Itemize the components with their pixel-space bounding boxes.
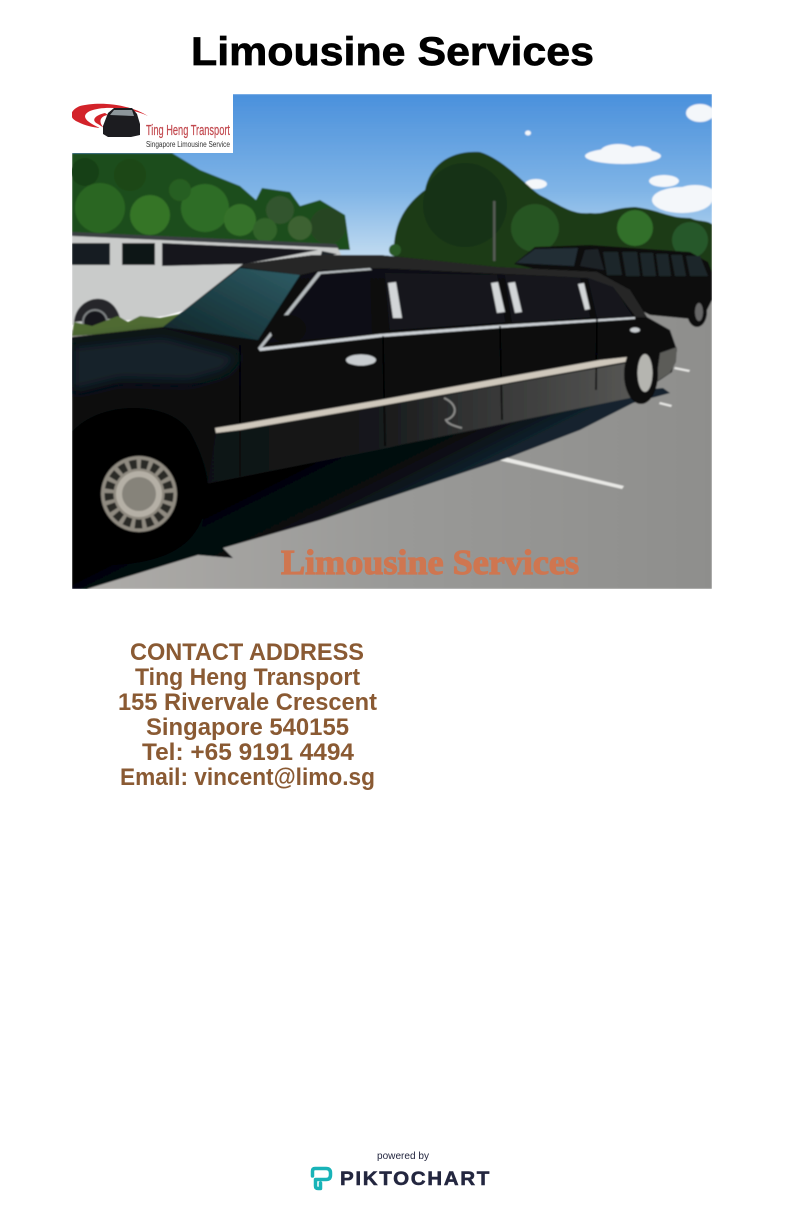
lower side panel — [208, 362, 633, 483]
windshield — [163, 268, 300, 340]
photo caption: Limousine Services — [281, 543, 579, 582]
black limo in the background — [514, 245, 712, 327]
asphalt ground — [72, 300, 712, 589]
door handle — [346, 354, 376, 366]
limo body — [72, 255, 677, 560]
car shadow — [72, 388, 670, 589]
chrome sill — [258, 317, 635, 351]
photo: limousines in a parking lot — [71, 94, 715, 589]
front window — [268, 272, 372, 343]
hood highlight — [72, 335, 240, 392]
footer: powered by Piktochart — [312, 1151, 491, 1190]
contact address: CONTACT ADDRESS — [130, 639, 364, 666]
trees: left group — [71, 153, 350, 250]
contact address: Email: vincent@limo.sg — [120, 764, 375, 791]
chrome side strip — [215, 356, 636, 433]
roof — [240, 255, 647, 317]
side mirror — [270, 315, 306, 343]
sky — [72, 94, 712, 269]
logo tagline: Singapore Limousine Service — [146, 140, 230, 149]
rear bumper — [656, 347, 677, 382]
contact address: Tel: +65 9191 4494 — [142, 739, 355, 766]
clouds — [525, 104, 715, 213]
contact address — [118, 639, 377, 791]
rear window — [588, 278, 633, 317]
contact address: Ting Heng Transport — [135, 664, 360, 691]
title: Limousine Services — [191, 30, 594, 74]
contact address: 155 Rivervale Crescent — [118, 689, 377, 716]
front wheel — [72, 408, 208, 565]
body reflection — [444, 398, 462, 428]
rear wheel — [624, 344, 658, 404]
red swoosh — [71, 104, 148, 128]
icon: Piktochart logo — [312, 1168, 330, 1188]
contact address: Singapore 540155 — [146, 714, 349, 741]
white stretch hummer — [72, 232, 341, 336]
inner swoosh — [94, 113, 108, 128]
logo name: Ting Heng Transport — [146, 122, 231, 139]
Piktochart wordmark: PIKTOCHART — [340, 1169, 491, 1190]
window chrome strips — [388, 282, 590, 318]
logo car — [103, 108, 140, 137]
main black limousine — [72, 255, 677, 565]
door lines — [240, 318, 597, 476]
trees: right group — [388, 150, 712, 272]
parking lines — [500, 366, 690, 490]
photo scene — [71, 94, 715, 589]
powered by label: powered by — [377, 1151, 429, 1162]
logo: Ting Heng Transport — [71, 94, 233, 153]
middle windows — [385, 273, 505, 330]
